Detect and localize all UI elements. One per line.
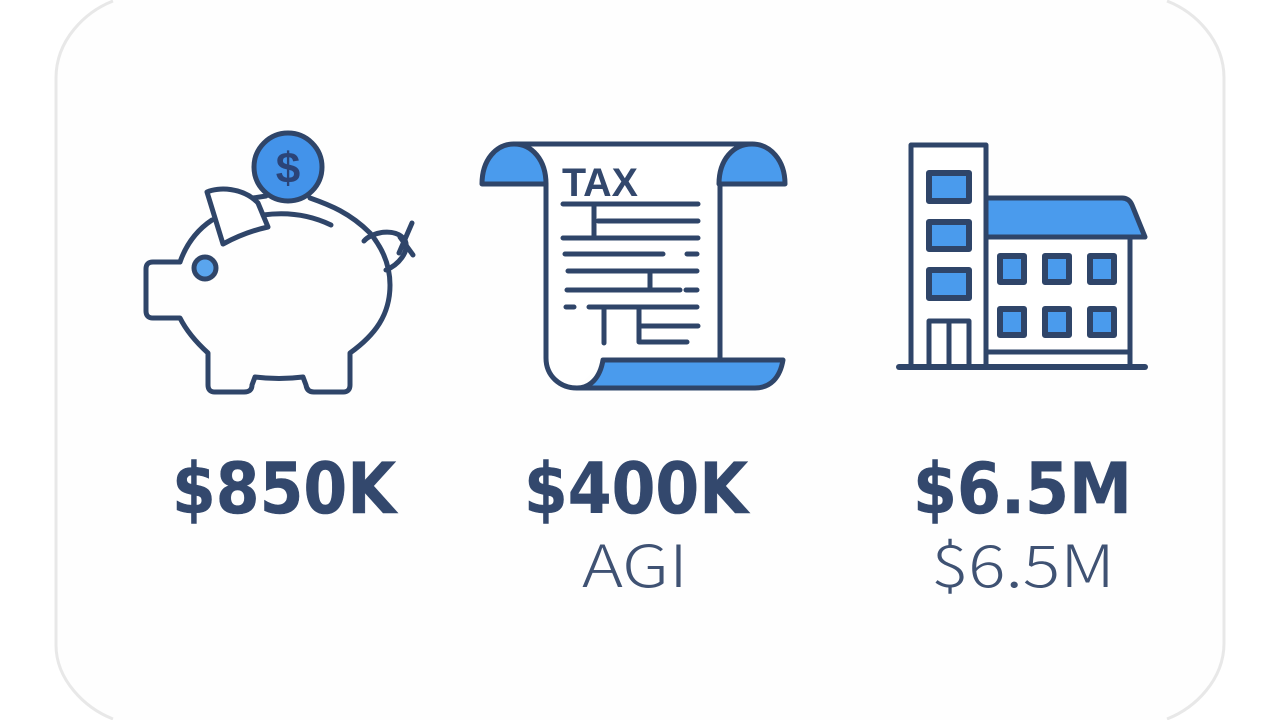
icon: piggy bank [146,189,413,392]
icon: dollar coin: $ [276,144,300,193]
label: tax heading: TAX [562,161,638,205]
stat: 850K: $850K [172,448,398,530]
icon: tax document [482,144,785,388]
text lines on tax form [563,204,698,343]
icon: buildings [899,145,1145,367]
icon: dollar coin [254,133,322,201]
label: 6.5M secondary: $6.5M [931,520,1115,604]
stat: 400K: $400K [524,448,750,530]
stat: 6.5M: $6.5M [913,448,1132,530]
label: AGI: AGI [582,520,688,604]
